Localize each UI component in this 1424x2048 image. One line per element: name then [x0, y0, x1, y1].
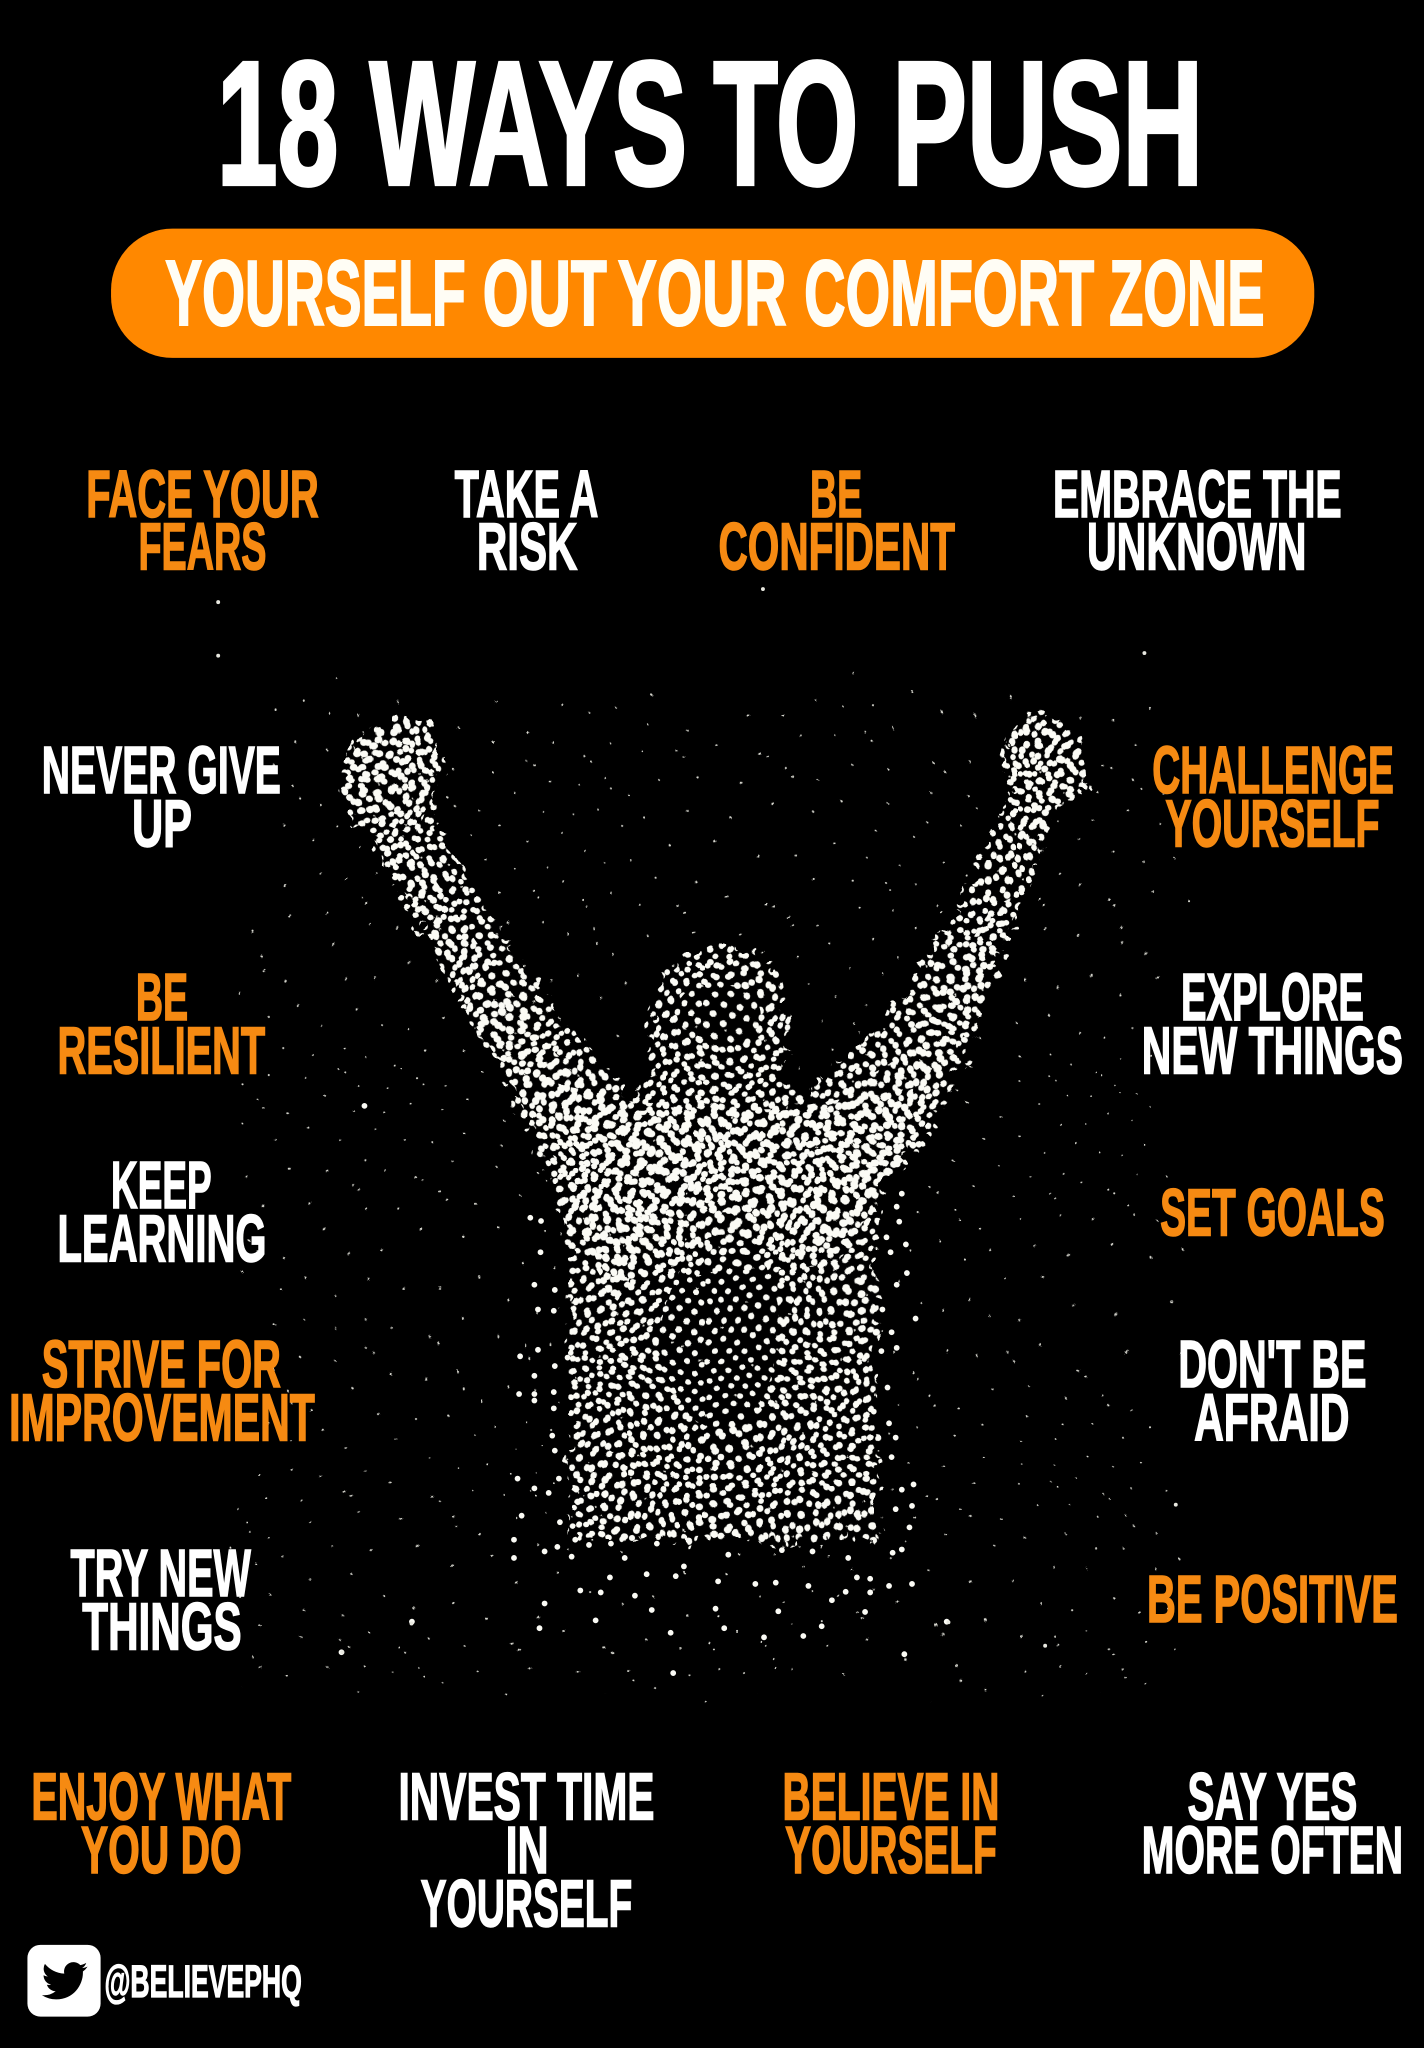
label: never give up	[42, 734, 281, 861]
label: strive for improvement: STRIVE FOR	[42, 1328, 281, 1402]
label: invest time in yourself: IN	[506, 1814, 549, 1888]
label: try new things	[71, 1537, 251, 1665]
icon: twitter bird	[27, 1945, 101, 2017]
label: never give up: UP	[132, 787, 192, 861]
label: invest time in yourself: YOURSELF	[421, 1868, 632, 1942]
label: be confident: BE	[810, 458, 862, 532]
label: be resilient: RESILIENT	[57, 1015, 265, 1089]
stray particles	[218, 589, 1176, 1652]
label: strive for improvement	[9, 1328, 315, 1456]
label: enjoy what you do: ENJOY WHAT	[31, 1760, 291, 1834]
label: invest time in yourself	[398, 1760, 655, 1942]
label: embrace the unknown	[1053, 458, 1342, 584]
particle figure with raised arms	[248, 692, 1176, 1698]
subtitle banner: ZONE	[1109, 241, 1265, 345]
label: be confident	[719, 458, 955, 584]
label: believe in yourself: YOURSELF	[785, 1814, 997, 1888]
label: invest time in yourself: INVEST TIME	[398, 1760, 655, 1834]
label: be resilient	[57, 961, 265, 1089]
title	[217, 25, 1203, 222]
label: say yes more often	[1142, 1760, 1403, 1888]
label: enjoy what you do: YOU DO	[81, 1814, 242, 1888]
label: explore new things	[1142, 961, 1403, 1089]
label: believe in yourself	[783, 1760, 999, 1888]
subtitle banner: YOUR	[618, 241, 786, 345]
label: keep learning	[57, 1149, 267, 1277]
label: face your fears: FEARS	[138, 510, 267, 584]
twitter handle: @BELIEVEPHQ	[105, 1956, 302, 2007]
label: try new things: TRY NEW	[71, 1537, 251, 1611]
title: 18	[217, 25, 338, 222]
label: be resilient: BE	[136, 961, 188, 1035]
label: challenge yourself	[1152, 734, 1394, 861]
title: WAYS	[370, 25, 687, 222]
label: face your fears	[86, 458, 319, 584]
title: TO	[713, 25, 858, 222]
label: believe in yourself: BELIEVE IN	[783, 1760, 999, 1834]
label: keep learning: LEARNING	[57, 1203, 267, 1277]
label: face your fears: FACE YOUR	[86, 458, 319, 532]
label: don't be afraid	[1178, 1328, 1367, 1456]
label: take a risk	[455, 458, 598, 584]
label: be confident: CONFIDENT	[719, 510, 955, 584]
subtitle banner: COMFORT	[804, 241, 1094, 345]
label: strive for improvement: IMPROVEMENT	[9, 1382, 315, 1456]
label: enjoy what you do	[31, 1760, 291, 1888]
title: PUSH	[892, 25, 1203, 222]
label: keep learning: KEEP	[111, 1149, 212, 1223]
subtitle banner: OUT	[483, 241, 607, 345]
label: never give up: NEVER GIVE	[42, 734, 281, 808]
label: take a risk: TAKE A	[455, 458, 598, 532]
subtitle banner: YOURSELF	[165, 241, 466, 345]
subtitle banner	[111, 229, 1314, 358]
label: take a risk: RISK	[477, 510, 577, 584]
label: try new things: THINGS	[82, 1591, 242, 1665]
